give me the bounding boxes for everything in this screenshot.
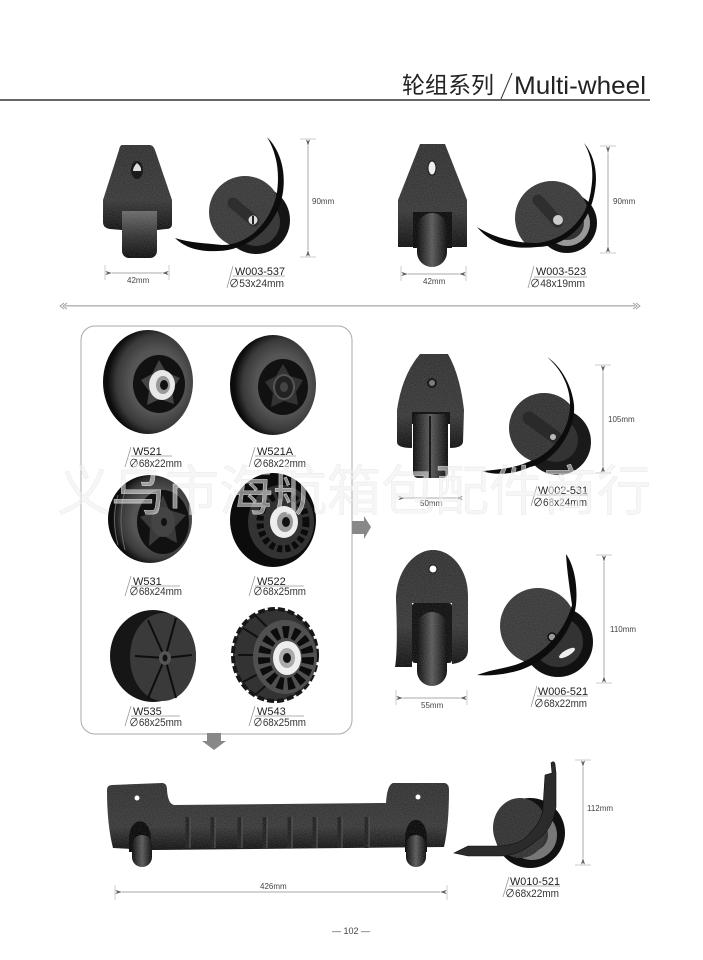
label: W521A [249, 446, 306, 470]
height dimension: 90mm [613, 197, 636, 206]
front view [103, 145, 172, 258]
width dimension: 42mm [127, 276, 150, 285]
wheel: W535 [110, 610, 196, 702]
label: W521A: ∅68x22mm [253, 458, 306, 470]
label: W543 [249, 706, 306, 729]
label: W522: W522 [257, 576, 286, 588]
model label: ∅53x24mm [229, 278, 284, 290]
height dimension [300, 139, 335, 257]
product: W010-521 bar [107, 760, 613, 900]
bar side view [454, 762, 565, 868]
model label: W006-521 [538, 686, 588, 698]
model label: ∅68x24mm [533, 497, 587, 509]
label: W521A: W521A [257, 446, 294, 458]
height dimension [595, 365, 635, 473]
wheel: W521 [103, 330, 193, 434]
label: W521 [125, 446, 182, 470]
label: W531: ∅68x24mm [129, 586, 182, 598]
label: W535: ∅68x25mm [129, 717, 182, 729]
model label [531, 686, 588, 710]
wheel: W521A [230, 335, 316, 435]
label: W522 [249, 576, 306, 598]
label: W535: W535 [133, 706, 162, 718]
width dimension: 426mm [260, 882, 287, 891]
side view [477, 143, 597, 255]
arrow: down [202, 733, 226, 750]
title: Multi-wheel [514, 72, 646, 100]
wheel: W531 [108, 475, 192, 563]
label: W543: ∅68x25mm [253, 717, 306, 729]
side view [477, 554, 593, 677]
height dimension [575, 760, 613, 865]
product: W003-523 [398, 143, 636, 290]
model label: ∅68x22mm [505, 888, 559, 900]
width dimension [401, 266, 466, 286]
model label [528, 266, 587, 290]
width dimension [405, 498, 456, 508]
side view [482, 357, 591, 475]
height dimension: 112mm [587, 804, 613, 813]
wheel: W522 [230, 473, 316, 567]
height dimension: 110mm [610, 625, 636, 634]
width dimension: 50mm [420, 499, 443, 508]
model label [227, 266, 285, 290]
width dimension [396, 690, 467, 710]
side view [175, 137, 290, 254]
arrow: right [352, 516, 371, 539]
wheel: W543 [233, 609, 317, 701]
model label [531, 485, 588, 509]
label: W531: W531 [133, 576, 162, 588]
width dimension: 55mm [421, 701, 444, 710]
label: W522: ∅68x25mm [253, 586, 306, 598]
product: W003-537 [103, 137, 335, 290]
height dimension: 105mm [608, 415, 635, 424]
front view [395, 550, 468, 686]
label: W521: ∅68x22mm [129, 458, 182, 470]
label: W535 [125, 706, 182, 729]
height dimension: 90mm [312, 197, 335, 206]
label: W521: W521 [133, 446, 162, 458]
front view [397, 354, 464, 478]
watermark: 义乌市海航箱包配件商行 [57, 462, 651, 522]
model label [503, 876, 560, 900]
model label: W010-521 [510, 876, 560, 888]
panel: wheel options [81, 326, 352, 734]
title rule [0, 99, 650, 101]
width dimension: 42mm [423, 277, 446, 286]
section divider with chevrons [60, 303, 640, 309]
label: W531 [125, 576, 182, 598]
model label: W003-523 [536, 266, 586, 278]
product: W006-521 [395, 550, 636, 710]
model label: ∅48x19mm [530, 278, 585, 290]
height dimension [596, 555, 636, 683]
product: W002-531 [397, 354, 635, 509]
title: 轮组系列 [402, 72, 494, 98]
page number: — 102 — [332, 926, 370, 936]
title [402, 72, 646, 100]
height dimension [600, 146, 636, 253]
bar front view [107, 783, 449, 867]
width dimension [105, 265, 169, 285]
model label: W003-537 [235, 266, 285, 278]
front view [398, 144, 467, 267]
model label: W002-531 [538, 485, 588, 497]
model label: ∅68x22mm [534, 698, 587, 710]
width dimension [115, 882, 447, 900]
label: W543: W543 [257, 706, 286, 718]
